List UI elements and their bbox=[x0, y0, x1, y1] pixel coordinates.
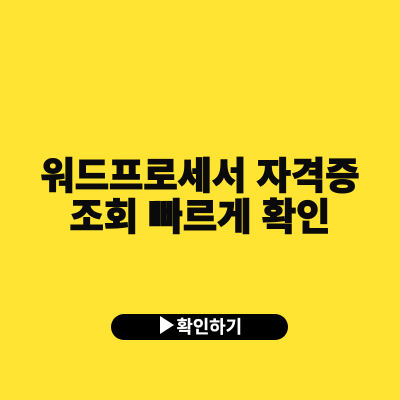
icon: play triangle bbox=[160, 316, 174, 334]
button: confirm bbox=[111, 314, 288, 340]
title bbox=[40, 155, 360, 238]
title line 2: 조회 빠르게 확인 bbox=[70, 196, 330, 238]
button label: 확인하기 bbox=[176, 317, 242, 337]
title line 1: 워드프로세서 자격증 bbox=[40, 155, 360, 197]
